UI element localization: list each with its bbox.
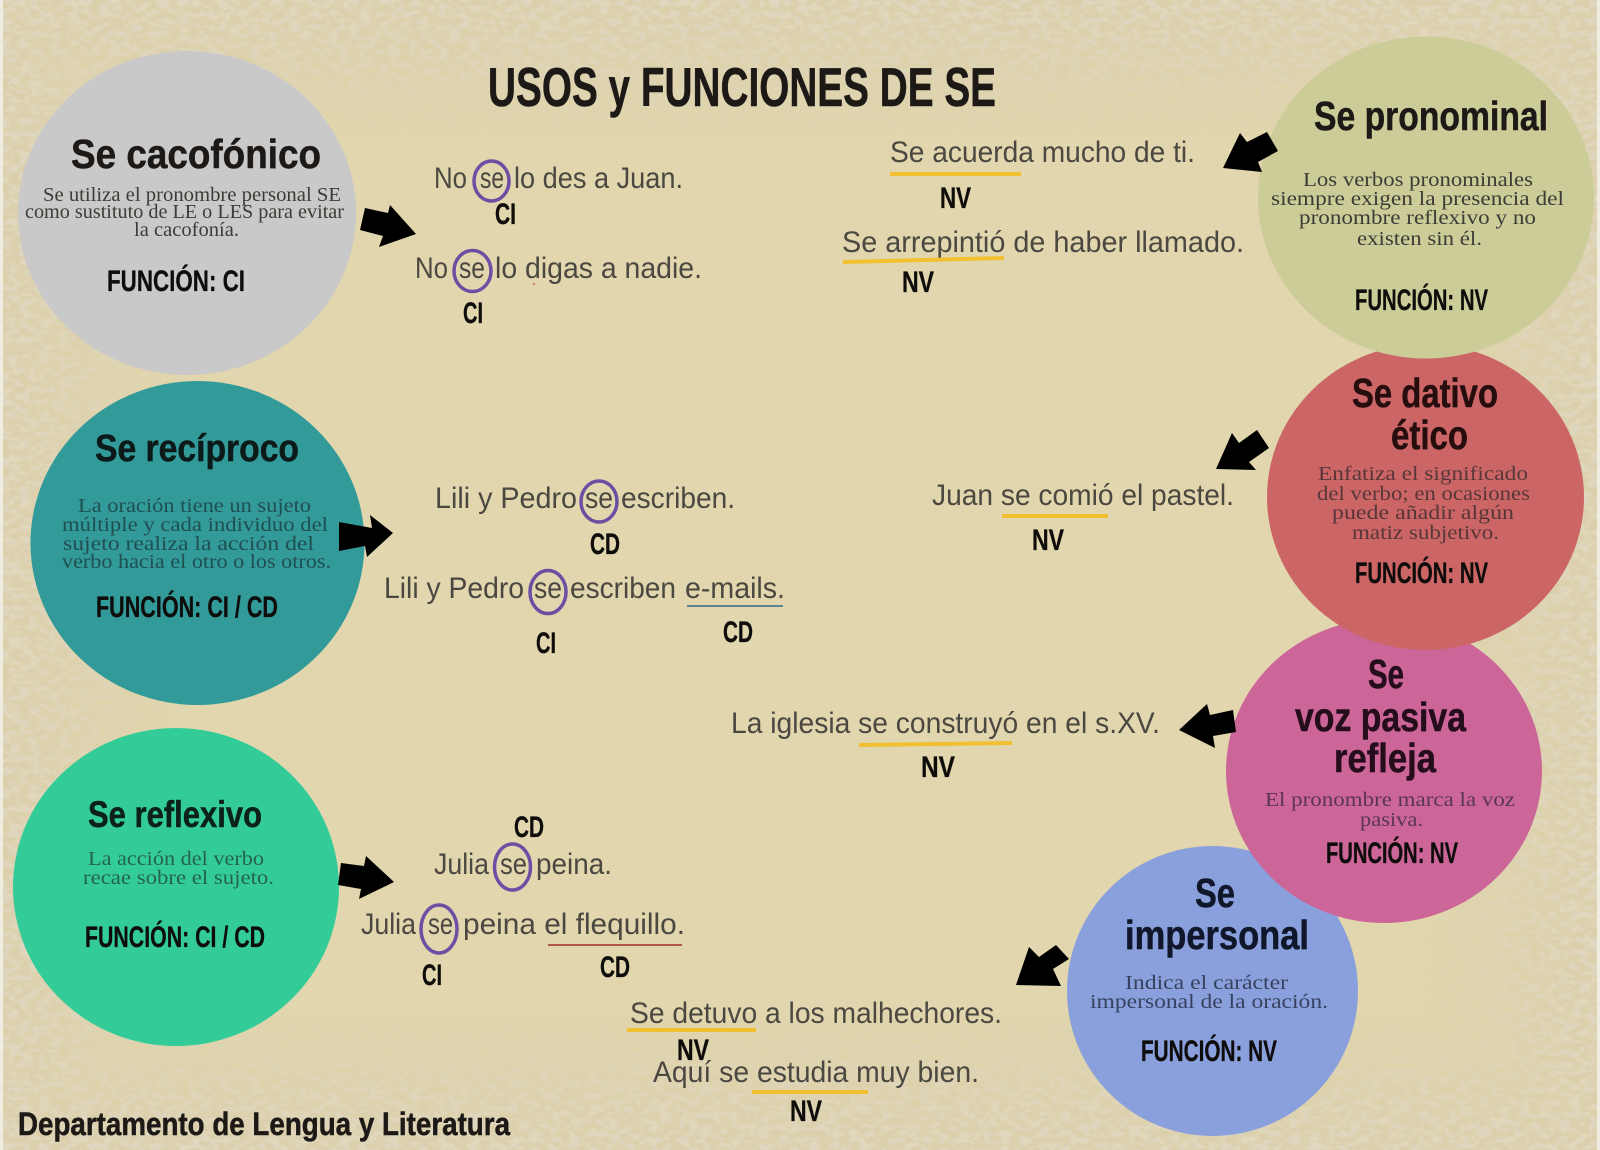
description: se reflexivo: La acción del verbo xyxy=(88,849,264,870)
description: se reciproco xyxy=(62,496,331,573)
example: Julia se peina el flequillo: peina el flequillo. xyxy=(463,908,685,941)
description: se dativo etico: Enfatiza el significado xyxy=(1318,464,1528,485)
panel: se dativo etico xyxy=(1267,344,1584,650)
description: se reciproco: sujeto realiza la acción del xyxy=(63,534,315,555)
description: se pronominal xyxy=(1271,170,1565,250)
description: se cacofonico: la cacofonía. xyxy=(134,220,239,241)
heading: se reciproco: Se recíproco xyxy=(95,428,299,470)
example: no se lo digas a nadie: lo digas a nadie. xyxy=(495,252,702,285)
example: no se lo digas a nadie: No xyxy=(415,252,448,285)
description: se voz pasiva refleja: El pronombre marca la voz xyxy=(1265,790,1515,811)
description: se impersonal: Indica el carácter xyxy=(1125,973,1289,994)
example: la iglesia se construyo: La iglesia se construyó en el s.XV. xyxy=(731,707,1160,740)
example: Julia se peina: Julia xyxy=(434,848,489,881)
arrow: impersonal xyxy=(1016,945,1069,986)
example: no se lo des a Juan: se xyxy=(480,162,504,195)
heading: se pronominal: Se pronominal xyxy=(1314,93,1548,139)
description: se dativo etico: puede añadir algún xyxy=(1332,503,1514,524)
description: se impersonal xyxy=(1090,973,1328,1013)
example: no se lo des a Juan: No xyxy=(434,162,467,195)
heading: se voz pasiva refleja: Se xyxy=(1368,651,1404,697)
heading: se impersonal xyxy=(1125,870,1309,958)
example: no se lo digas a nadie: CI xyxy=(463,297,483,330)
function label: NV: FUNCIÓN: NV xyxy=(1141,1034,1277,1068)
example: Lili y Pedro se escriben: escriben. xyxy=(621,482,735,515)
example: Julia se peina el flequillo: CI xyxy=(422,959,442,992)
description: se voz pasiva refleja xyxy=(1265,790,1515,831)
example: se detuvo a los malhechores: Se detuvo a los malhechores. xyxy=(630,997,1002,1030)
description: se dativo etico: del verbo; en ocasiones xyxy=(1317,484,1530,505)
example: Lili y Pedro se escriben e-mails: e-mails. xyxy=(685,572,785,605)
function label: CI: FUNCIÓN: CI xyxy=(107,264,245,298)
heading: se voz pasiva refleja: refleja xyxy=(1334,735,1437,781)
heading: se dativo etico: ético xyxy=(1391,412,1468,458)
example: Julia se peina el flequillo: se xyxy=(428,908,453,941)
example: Lili y Pedro se escriben: CD xyxy=(590,528,620,561)
example: Lili y Pedro se escriben xyxy=(435,481,735,561)
heading: se dativo etico: Se dativo xyxy=(1352,370,1498,416)
arrow: voz pasiva xyxy=(1179,704,1236,748)
description: se voz pasiva refleja: pasiva. xyxy=(1360,810,1423,831)
arrow: dativo etico xyxy=(1216,430,1269,470)
title: USOS y FUNCIONES DE SE xyxy=(488,56,996,118)
function label: CI / CD: FUNCIÓN: CI / CD xyxy=(85,920,265,954)
example: Julia se peina xyxy=(434,811,612,890)
example: se detuvo a los malhechores xyxy=(627,997,1002,1067)
example: la iglesia se construyo: NV xyxy=(921,751,955,784)
panel: se pronominal xyxy=(1258,36,1594,358)
panel: se impersonal xyxy=(1067,846,1358,1136)
example: se arrepintio de haber llamado: Se arrepintió de haber llamado. xyxy=(842,226,1244,259)
example: Lili y Pedro se escriben e-mails: CD xyxy=(723,616,753,649)
example: Julia se peina: peina. xyxy=(536,848,612,881)
arrow: pronominal xyxy=(1223,132,1278,172)
heading: se impersonal: Se xyxy=(1195,870,1235,916)
example: se acuerda mucho de ti: Se acuerda mucho de ti. xyxy=(890,136,1195,169)
example: Julia se peina: se xyxy=(500,848,527,881)
arrow: reciproco xyxy=(339,515,393,557)
panel: se reciproco xyxy=(30,381,364,705)
example: no se lo des a Juan: lo des a Juan. xyxy=(514,162,683,195)
arrow: reflexivo xyxy=(338,856,394,899)
description: se dativo etico xyxy=(1317,464,1530,544)
example: Lili y Pedro se escriben e-mails: escriben xyxy=(570,572,676,605)
description: se cacofonico: como sustituto de LE o LES para evitar xyxy=(25,202,345,223)
example: se arrepintio de haber llamado xyxy=(842,226,1244,299)
heading: se voz pasiva refleja xyxy=(1295,651,1467,781)
heading: se dativo etico xyxy=(1352,370,1498,458)
heading: se cacofonico: Se cacofónico xyxy=(71,131,321,177)
example: Juan se comio el pastel: NV xyxy=(1032,524,1064,557)
description: se cacofonico xyxy=(25,185,345,241)
example: Lili y Pedro se escriben: Lili y Pedro xyxy=(435,482,577,515)
description: se reflexivo: recae sobre el sujeto. xyxy=(83,868,274,889)
description: se pronominal: existen sin él. xyxy=(1357,229,1482,250)
example: aqui se estudia muy bien: Aquí se estudia muy bien. xyxy=(653,1056,979,1089)
example: Juan se comio el pastel: Juan se comió el pastel. xyxy=(932,479,1234,512)
description: se reciproco: múltiple y cada individuo del xyxy=(62,515,329,536)
function label: NV: FUNCIÓN: NV xyxy=(1326,836,1458,870)
footer: department: Departamento de Lengua y Literatura xyxy=(18,1106,510,1142)
example: Lili y Pedro se escriben: se xyxy=(585,482,613,515)
description: se pronominal: pronombre reflexivo y no xyxy=(1299,208,1536,229)
example: se arrepintio de haber llamado: NV xyxy=(902,266,934,299)
example: Lili y Pedro se escriben e-mails: CI xyxy=(536,627,556,660)
example: no se lo des a Juan: CI xyxy=(495,198,516,231)
example: Juan se comio el pastel xyxy=(932,479,1234,557)
example: no se lo digas a nadie xyxy=(415,250,702,330)
description: se reciproco: La oración tiene un sujeto xyxy=(78,496,311,517)
description: se dativo etico: matiz subjetivo. xyxy=(1352,523,1499,544)
panel: se voz pasiva refleja xyxy=(1226,619,1542,923)
description: se reciproco: verbo hacia el otro o los otros. xyxy=(62,552,331,573)
panel: se reflexivo xyxy=(13,728,339,1046)
description: se cacofonico: Se utiliza el pronombre personal SE xyxy=(43,185,341,206)
example: aqui se estudia muy bien: NV xyxy=(790,1095,822,1128)
example: se acuerda mucho de ti xyxy=(890,136,1195,215)
heading: se reflexivo: Se reflexivo xyxy=(88,794,262,835)
example: se acuerda mucho de ti: NV xyxy=(940,182,971,215)
example: Julia se peina el flequillo xyxy=(361,905,685,992)
example: Lili y Pedro se escriben e-mails: Lili y Pedro xyxy=(384,572,524,605)
function label: NV: FUNCIÓN: NV xyxy=(1355,283,1488,317)
example: no se lo digas a nadie: se xyxy=(459,252,485,285)
description: se impersonal: impersonal de la oración. xyxy=(1090,992,1328,1013)
example: la iglesia se construyo xyxy=(731,707,1160,784)
example: se detuvo a los malhechores: NV xyxy=(677,1034,709,1067)
arrow: cacofonico xyxy=(360,205,416,247)
panel: se cacofonico xyxy=(18,51,356,375)
example: Lili y Pedro se escriben e-mails xyxy=(384,570,785,660)
example: aqui se estudia muy bien xyxy=(653,1056,979,1128)
heading: se voz pasiva refleja: voz pasiva xyxy=(1295,694,1467,740)
example: Julia se peina el flequillo: Julia xyxy=(361,908,416,941)
description: se reflexivo xyxy=(83,849,274,889)
example: Lili y Pedro se escriben e-mails: se xyxy=(534,572,562,605)
function label: CI / CD: FUNCIÓN: CI / CD xyxy=(96,590,278,624)
example: Julia se peina el flequillo: CD xyxy=(600,951,630,984)
example: Julia se peina: CD xyxy=(514,811,544,844)
description: se pronominal: siempre exigen la presencia del xyxy=(1271,189,1565,210)
function label: NV: FUNCIÓN: NV xyxy=(1355,556,1488,590)
description: se pronominal: Los verbos pronominales xyxy=(1303,170,1533,191)
heading: se impersonal: impersonal xyxy=(1125,912,1309,958)
example: no se lo des a Juan xyxy=(434,161,683,231)
